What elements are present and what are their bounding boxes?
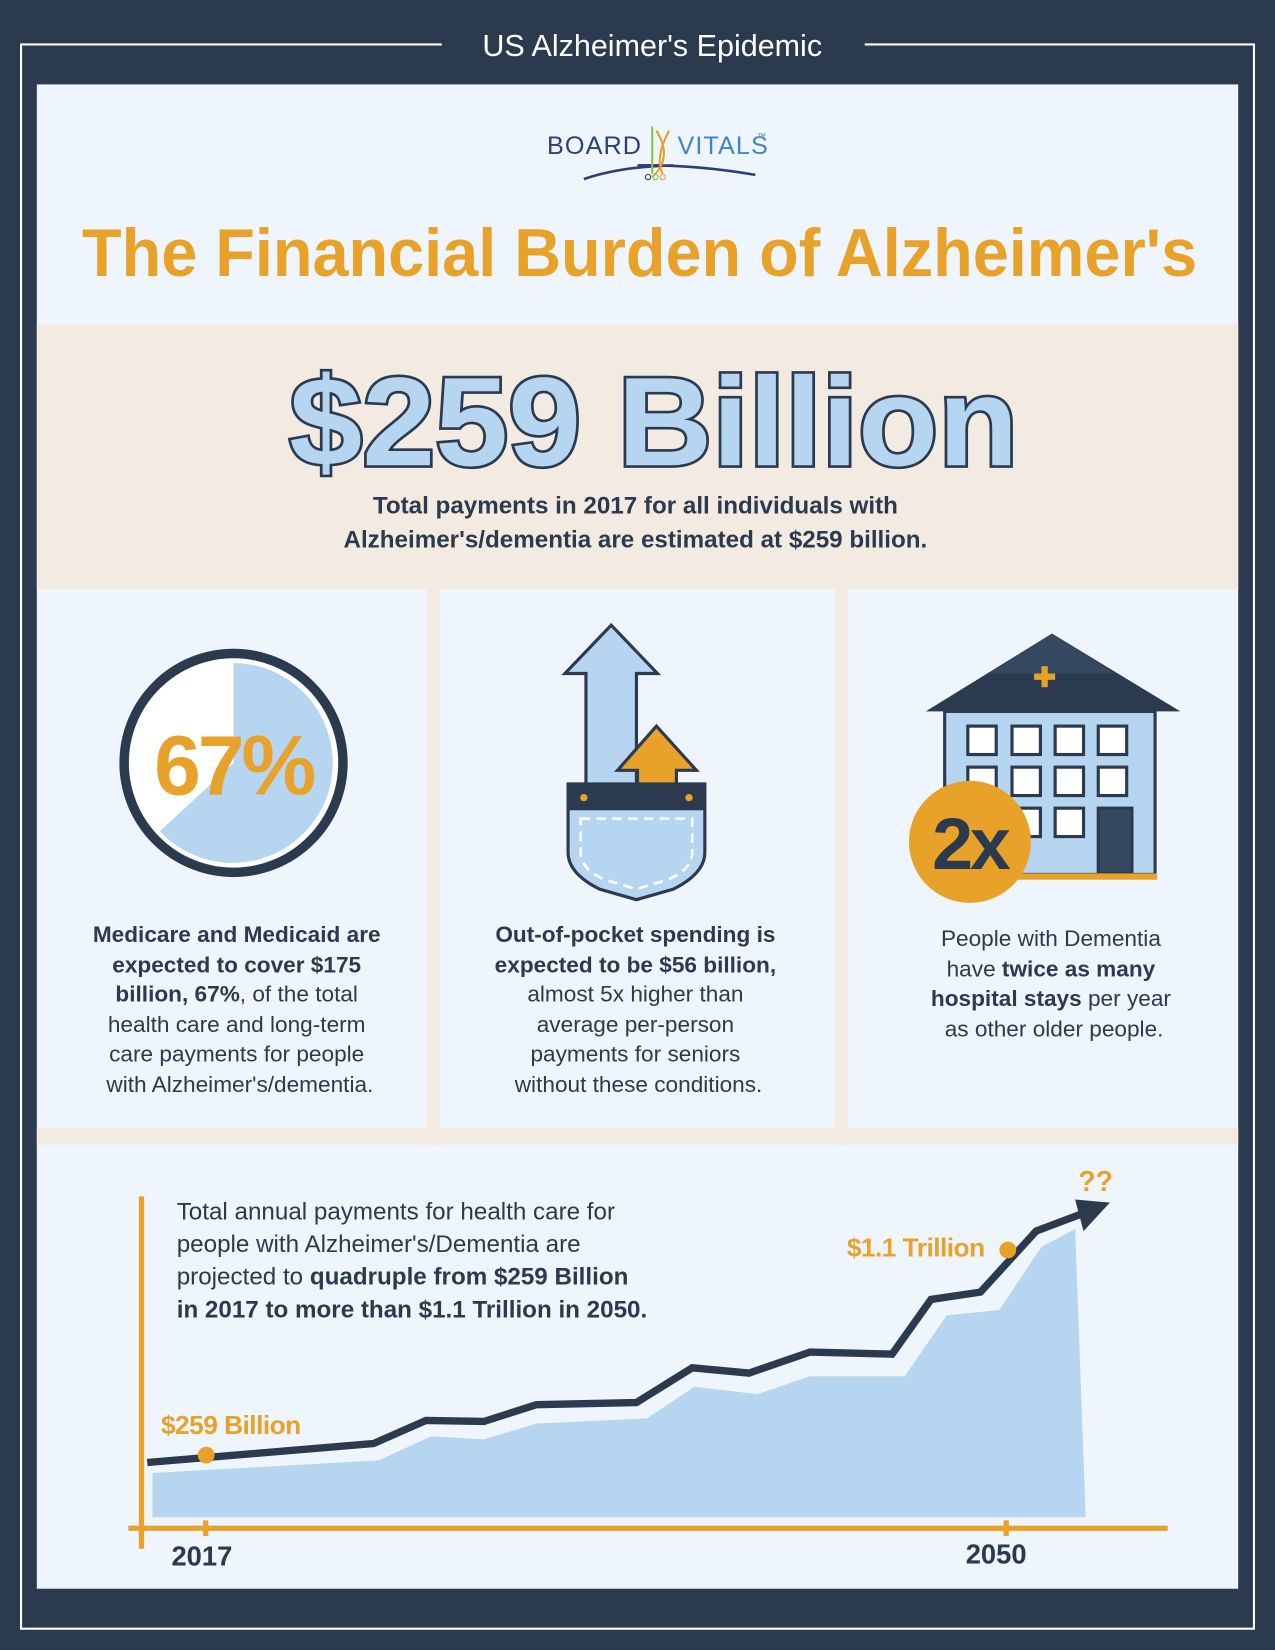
logo: [547, 126, 769, 180]
icon: arrows and pocket: [565, 625, 705, 900]
panel: out-of-pocket: [495, 625, 782, 1097]
panel: hospital stays: People with Dementia: [941, 926, 1161, 951]
panel: hospital stays: have twice as many: [947, 956, 1155, 981]
panel: medicare: with Alzheimer's/dementia.: [105, 1072, 373, 1097]
chart description: projected to quadruple from $259 Billion: [177, 1264, 628, 1291]
band: total payments: $259 Billion: [289, 351, 1018, 492]
chart: projected payments: 2050: [966, 1538, 1027, 1569]
panel: hospital stays: hospital stays per year: [931, 986, 1171, 1011]
chart description: in 2017 to more than $1.1 Trillion in 2050.: [177, 1296, 647, 1323]
chart: projected payments: $259 Billion: [161, 1410, 301, 1440]
logo: BOARD: [547, 132, 642, 160]
panel: medicare: billion, 67%, of the total: [115, 982, 358, 1007]
icon: pie 67%: 67%: [154, 718, 314, 812]
chart: projected payments: $1.1 Trillion: [847, 1232, 985, 1262]
big number: $259 Billion: [289, 351, 1018, 492]
panel: out-of-pocket: expected to be $56 billion,: [495, 952, 776, 977]
chart description: Total annual payments for health care for: [177, 1198, 615, 1225]
band: total payments: [37, 324, 1238, 589]
panel: medicare: expected to cover $175: [112, 952, 361, 977]
main title: The Financial Burden of Alzheimer's: [82, 216, 1197, 291]
icon: hospital: 2x: [932, 802, 1011, 885]
icon: hospital: [909, 634, 1180, 903]
badge 2x: [909, 781, 1031, 903]
panel: medicare: health care and long-term: [108, 1012, 366, 1037]
band description: Total payments in 2017 for all individuals with: [373, 493, 898, 520]
chart: projected payments: ??: [1078, 1166, 1113, 1198]
panel: medicare: care payments for people: [109, 1042, 364, 1067]
panel: out-of-pocket: average per-person: [537, 1012, 734, 1037]
panel: hospital stays: [909, 634, 1180, 1041]
chart: projected payments: [128, 1166, 1168, 1572]
logo: ™: [757, 131, 766, 141]
logo: VITALS: [677, 132, 769, 160]
panel: out-of-pocket: without these conditions.: [514, 1072, 762, 1097]
panel: medicare: [93, 654, 387, 1097]
header title: US Alzheimer's Epidemic: [482, 29, 822, 63]
panel: out-of-pocket: Out-of-pocket spending is: [495, 922, 775, 947]
chart description: people with Alzheimer's/Dementia are: [177, 1231, 581, 1258]
band: total payments: Alzheimer's/dementia are estimated at $259 billion.: [343, 526, 927, 553]
panel: out-of-pocket: almost 5x higher than: [527, 982, 743, 1007]
panel: hospital stays: as other older people.: [945, 1016, 1163, 1041]
icon: pie 67%: [124, 654, 343, 872]
panel: medicare: Medicare and Medicaid are: [93, 922, 381, 947]
chart: projected payments: 2017: [171, 1541, 232, 1572]
panel: out-of-pocket: payments for seniors: [530, 1042, 740, 1067]
